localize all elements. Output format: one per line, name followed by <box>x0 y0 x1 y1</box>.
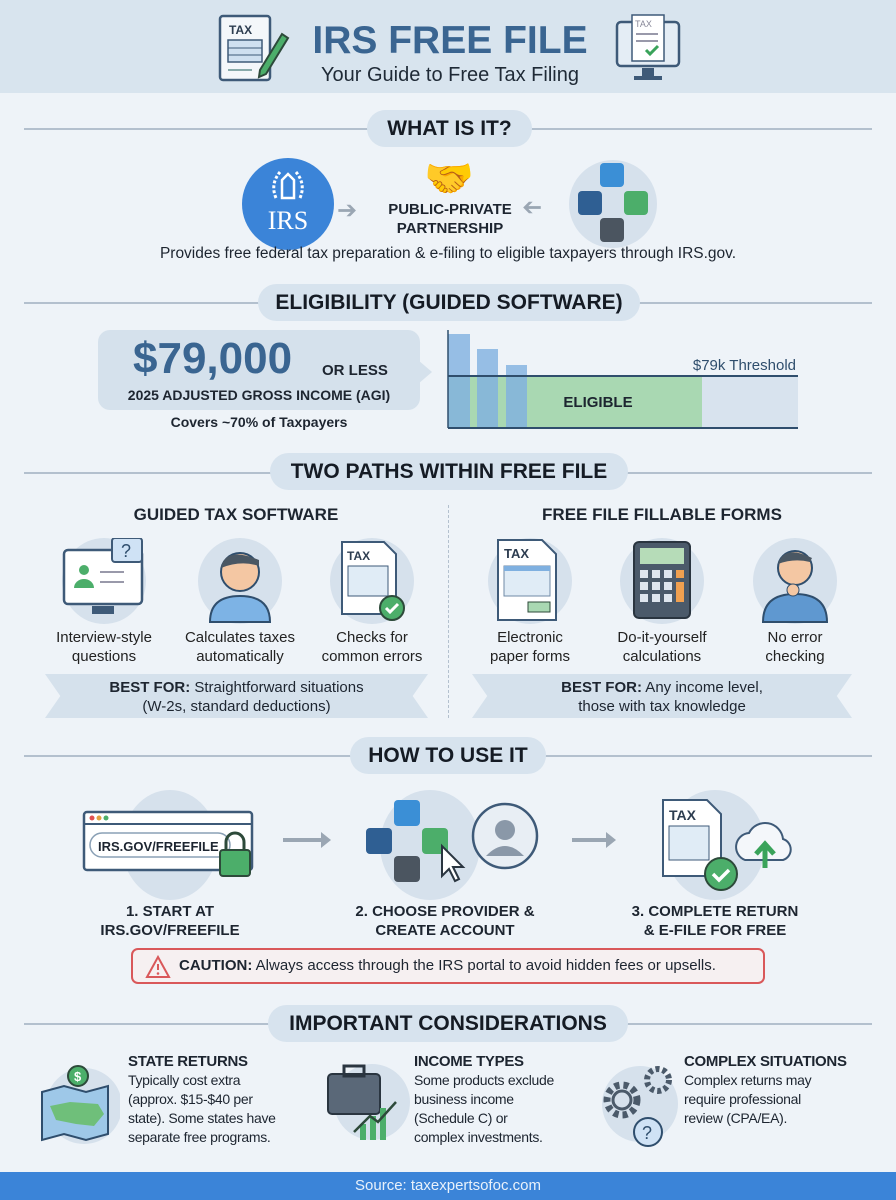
panel: fillable forms <box>472 505 852 718</box>
icon: interview monitor: ? <box>121 541 131 561</box>
best-for banner <box>45 674 428 718</box>
label: IRS.GOV/FREEFILE <box>100 922 240 939</box>
icon: gears and question: ? <box>642 1123 652 1143</box>
labels: Electronic <box>497 629 563 646</box>
icon: tax form, check and cloud upload <box>662 799 792 891</box>
panel: fillable forms: Do-it-yourself <box>617 629 707 646</box>
label: 3. COMPLETE RETURN <box>632 903 798 920</box>
callout: caution <box>131 948 765 984</box>
icon: monitor with tax form: TAX <box>635 19 652 29</box>
icon: calculator <box>633 541 691 619</box>
description: Provides free federal tax preparation & e-filing to eligible taxpayers through IRS.gov. <box>160 245 736 262</box>
label: CREATE ACCOUNT <box>375 922 515 939</box>
labels: Interview-style <box>56 629 152 646</box>
icon: map <box>41 1065 120 1144</box>
text: Some products exclude <box>414 1072 554 1088</box>
label: & E-FILE FOR FREE <box>644 922 786 939</box>
labels: paper forms <box>490 648 570 665</box>
coverage note: Covers ~70% of Taxpayers <box>171 414 347 430</box>
best-for banner: (W-2s, standard deductions) <box>142 698 331 715</box>
panel: fillable forms: No error <box>767 629 822 646</box>
heading: what is it <box>367 110 532 147</box>
labels <box>56 629 152 665</box>
text: Complex returns may <box>684 1072 811 1088</box>
text: INCOME TYPES <box>414 1053 524 1070</box>
partnership label: PUBLIC-PRIVATE <box>388 201 512 218</box>
chart: eligibility threshold <box>447 330 798 429</box>
icon: gears and question <box>602 1066 678 1147</box>
callout: caution: CAUTION: Always access through the IRS portal to avoid hidden fees or upsells. <box>179 957 716 974</box>
labels <box>490 629 570 665</box>
subtitle: Your Guide to Free Tax Filing <box>321 64 579 86</box>
callout: income limit: $79,000 <box>133 334 292 383</box>
text: require professional <box>684 1091 801 1107</box>
best-for banner <box>472 674 852 718</box>
icon: briefcase and chart <box>327 1064 410 1140</box>
label <box>100 903 240 939</box>
text: business income <box>414 1091 514 1107</box>
text: separate free programs. <box>128 1129 271 1145</box>
text: STATE RETURNS <box>128 1053 248 1070</box>
icon: browser with lock: IRS.GOV/FREEFILE <box>98 839 219 854</box>
icon: IRS seal: IRS <box>268 206 308 235</box>
panel: guided software: Calculates taxes <box>185 629 295 646</box>
icon: map: $ <box>74 1069 82 1084</box>
callout: income limit <box>98 330 420 410</box>
heading: what is it: WHAT IS IT? <box>387 117 512 140</box>
consideration: state returns <box>41 1053 276 1145</box>
icon: handshake: 🤝 <box>424 157 474 201</box>
text: state). Some states have <box>128 1110 276 1126</box>
partnership label: PARTNERSHIP <box>397 220 503 237</box>
arrow right: ➔ <box>337 197 357 224</box>
label <box>632 903 798 939</box>
icon: warning <box>145 955 171 978</box>
heading: two paths: TWO PATHS WITHIN FREE FILE <box>291 460 607 483</box>
icon: tax form check: TAX <box>347 549 370 563</box>
step 3 <box>632 790 798 939</box>
icon: electronic form <box>497 539 557 621</box>
text: (Schedule C) or <box>414 1110 508 1126</box>
text: COMPLEX SITUATIONS <box>684 1053 847 1070</box>
text <box>128 1053 276 1145</box>
header band <box>0 0 896 93</box>
text: review (CPA/EA). <box>684 1110 787 1126</box>
icon: providers and account <box>366 800 538 882</box>
heading: considerations <box>268 1005 628 1042</box>
partnership label <box>388 201 512 237</box>
heading: how to use <box>350 737 546 774</box>
callout: income limit: OR LESS <box>322 362 388 379</box>
arrow <box>283 838 325 842</box>
text: Typically cost extra <box>128 1072 240 1088</box>
panel: guided software <box>45 505 428 718</box>
label: 1. START AT <box>126 903 214 920</box>
label <box>355 903 535 939</box>
heading: FREE FILE FILLABLE FORMS <box>542 505 782 524</box>
footer: source: Source: taxexpertsofoc.com <box>355 1177 541 1194</box>
step 1 <box>82 790 254 939</box>
icon: monitor with tax form <box>616 14 680 80</box>
step 2 <box>355 790 538 939</box>
icon: tax document with pen <box>218 14 290 82</box>
callout: income limit: 2025 ADJUSTED GROSS INCOME (AGI) <box>128 387 390 403</box>
label: 2. CHOOSE PROVIDER & <box>355 903 535 920</box>
text: complex investments. <box>414 1129 543 1145</box>
icon: tax form, check and cloud upload: TAX <box>669 807 697 823</box>
icon: tax form check <box>341 541 405 621</box>
icon: browser with lock <box>82 810 254 877</box>
title: IRS FREE FILE <box>312 19 588 62</box>
icon: person <box>209 552 271 623</box>
icon: electronic form: TAX <box>504 546 529 561</box>
panel: fillable forms: checking <box>765 648 825 665</box>
chart: eligibility threshold: $79k Threshold <box>693 357 796 374</box>
heading: how to use: HOW TO USE IT <box>368 744 528 767</box>
best-for banner: those with tax knowledge <box>578 698 746 715</box>
icon: interview monitor <box>62 538 144 614</box>
best-for banner: BEST FOR: Straightforward situations <box>109 679 364 696</box>
heading: two paths <box>270 453 628 490</box>
footer: source <box>0 1172 896 1200</box>
consideration: complex situations <box>602 1053 847 1147</box>
arrow left: ➔ <box>522 194 542 221</box>
chart: eligibility threshold: ELIGIBLE <box>563 394 633 411</box>
text <box>414 1053 554 1145</box>
heading: eligibility: ELIGIBILITY (GUIDED SOFTWARE) <box>275 291 623 314</box>
panel: fillable forms: calculations <box>623 648 701 665</box>
panel: guided software: automatically <box>196 648 284 665</box>
consideration: income types <box>327 1053 554 1145</box>
heading: eligibility <box>258 284 640 321</box>
panel: guided software: Checks for <box>336 629 408 646</box>
labels: questions <box>72 648 136 665</box>
text <box>684 1053 847 1126</box>
best-for banner: BEST FOR: Any income level, <box>561 679 763 696</box>
arrow <box>572 838 610 842</box>
icon: tax document with pen: TAX <box>229 23 252 37</box>
panel: guided software: common errors <box>322 648 422 665</box>
icon: thinking person <box>762 550 828 623</box>
text: (approx. $15-$40 per <box>128 1091 253 1107</box>
icon: IRS seal <box>242 158 334 250</box>
heading: considerations: IMPORTANT CONSIDERATIONS <box>289 1012 607 1035</box>
icon: provider apps <box>569 160 657 248</box>
heading: GUIDED TAX SOFTWARE <box>134 505 338 524</box>
